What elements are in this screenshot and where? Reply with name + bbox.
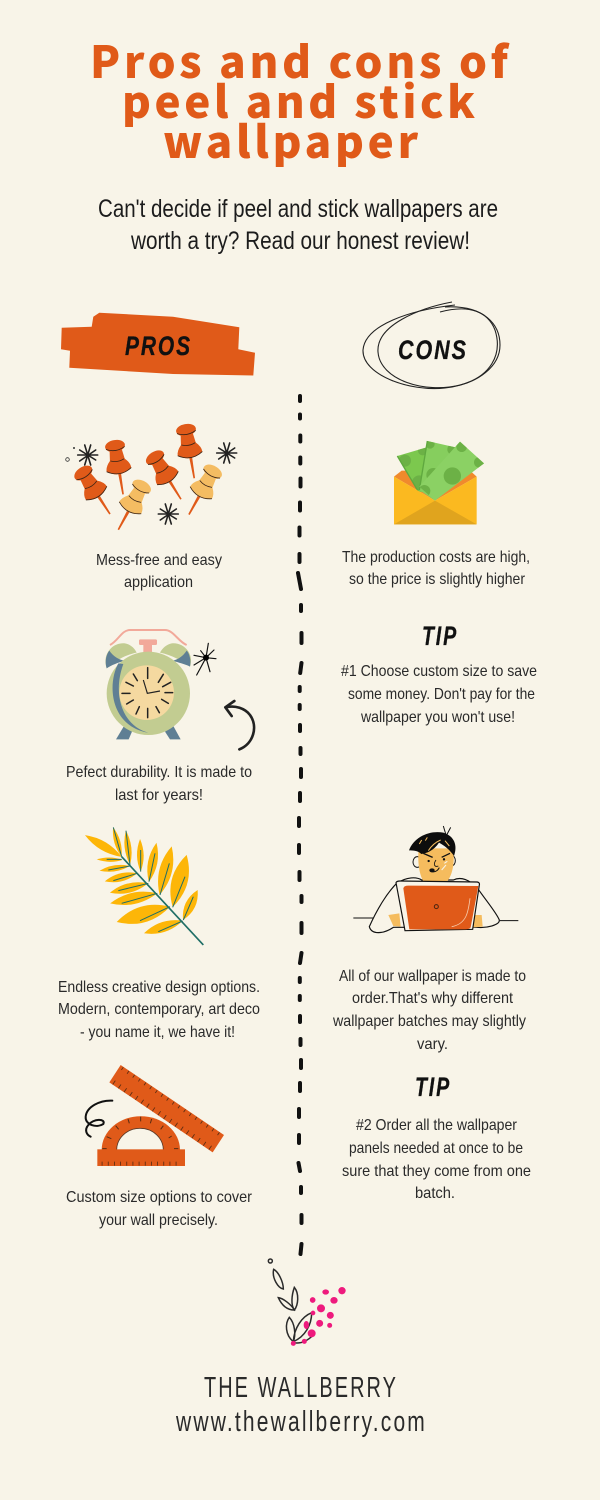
text: made to order: order.That's why different	[352, 990, 513, 1007]
icon: push pins	[66, 422, 237, 536]
icon: leaves and pink berries	[268, 1259, 346, 1346]
footer url: www.thewallberry.com	[175, 1406, 427, 1438]
title: Pros and cons of	[90, 27, 510, 91]
tip 1 heading: TIP	[422, 621, 458, 651]
title: peel and stick	[122, 67, 475, 131]
title	[90, 27, 510, 171]
text: production costs: The production costs are high,	[342, 549, 530, 566]
text: made to order: wallpaper batches may slightly	[332, 1013, 526, 1030]
tip 2 heading: TIP	[415, 1072, 451, 1102]
cons heading	[363, 302, 500, 389]
text: mess-free	[96, 552, 222, 591]
icon: ruler and protractor	[86, 1065, 224, 1166]
subtitle	[98, 195, 498, 255]
text: design options: - you name it, we have it!	[80, 1024, 235, 1041]
pros heading	[61, 313, 255, 376]
center dashed divider	[298, 396, 302, 1254]
subtitle: worth a try? Read our honest review!	[130, 227, 470, 255]
text: tip 1: #1 Choose custom size to save	[341, 663, 537, 680]
text: mess-free: Mess-free and easy	[96, 552, 222, 569]
text: tip 1: wallpaper you won't use!	[360, 709, 515, 726]
icon: curved arrow	[225, 701, 254, 749]
text: design options: Modern, contemporary, art deco	[58, 1001, 260, 1018]
text: durability: Pefect durability. It is made to	[66, 764, 252, 781]
text: custom size	[66, 1189, 253, 1229]
icon: person with laptop	[353, 826, 518, 933]
text: tip 2: #2 Order all the wallpaper	[356, 1117, 518, 1134]
title: wallpaper	[163, 107, 419, 171]
text: mess-free: application	[124, 574, 193, 591]
text: tip 1: some money. Don't pay for the	[348, 686, 535, 703]
text: custom size: Custom size options to cover	[66, 1189, 253, 1206]
text: durability	[66, 764, 252, 804]
text: production costs	[342, 549, 530, 588]
cons label: CONS	[398, 335, 468, 365]
text: tip 2: batch.	[415, 1185, 455, 1202]
text: design options	[58, 979, 260, 1041]
scribbled circle	[363, 302, 500, 389]
text: made to order: All of our wallpaper is made to	[339, 968, 526, 985]
icon: alarm clock	[105, 630, 216, 739]
text: tip 2	[342, 1117, 531, 1202]
footer brand: THE WALLBERRY	[204, 1372, 398, 1404]
text: made to order	[332, 968, 526, 1053]
brush stroke	[61, 313, 255, 376]
text: tip 2: panels needed at once to be	[349, 1140, 523, 1157]
text: made to order: vary.	[417, 1036, 448, 1053]
text: production costs: so the price is slightly higher	[349, 571, 526, 588]
text: design options: Endless creative design options.	[58, 979, 260, 996]
text: custom size: your wall precisely.	[99, 1212, 218, 1229]
pros label: PROS	[125, 331, 192, 361]
subtitle: Can't decide if peel and stick wallpapers are	[98, 195, 498, 223]
icon: palm leaf	[83, 826, 203, 945]
icon: money envelope	[394, 439, 485, 524]
text: tip 1	[341, 663, 537, 726]
text: tip 2: sure that they come from one	[342, 1163, 531, 1180]
text: durability: last for years!	[115, 787, 203, 804]
